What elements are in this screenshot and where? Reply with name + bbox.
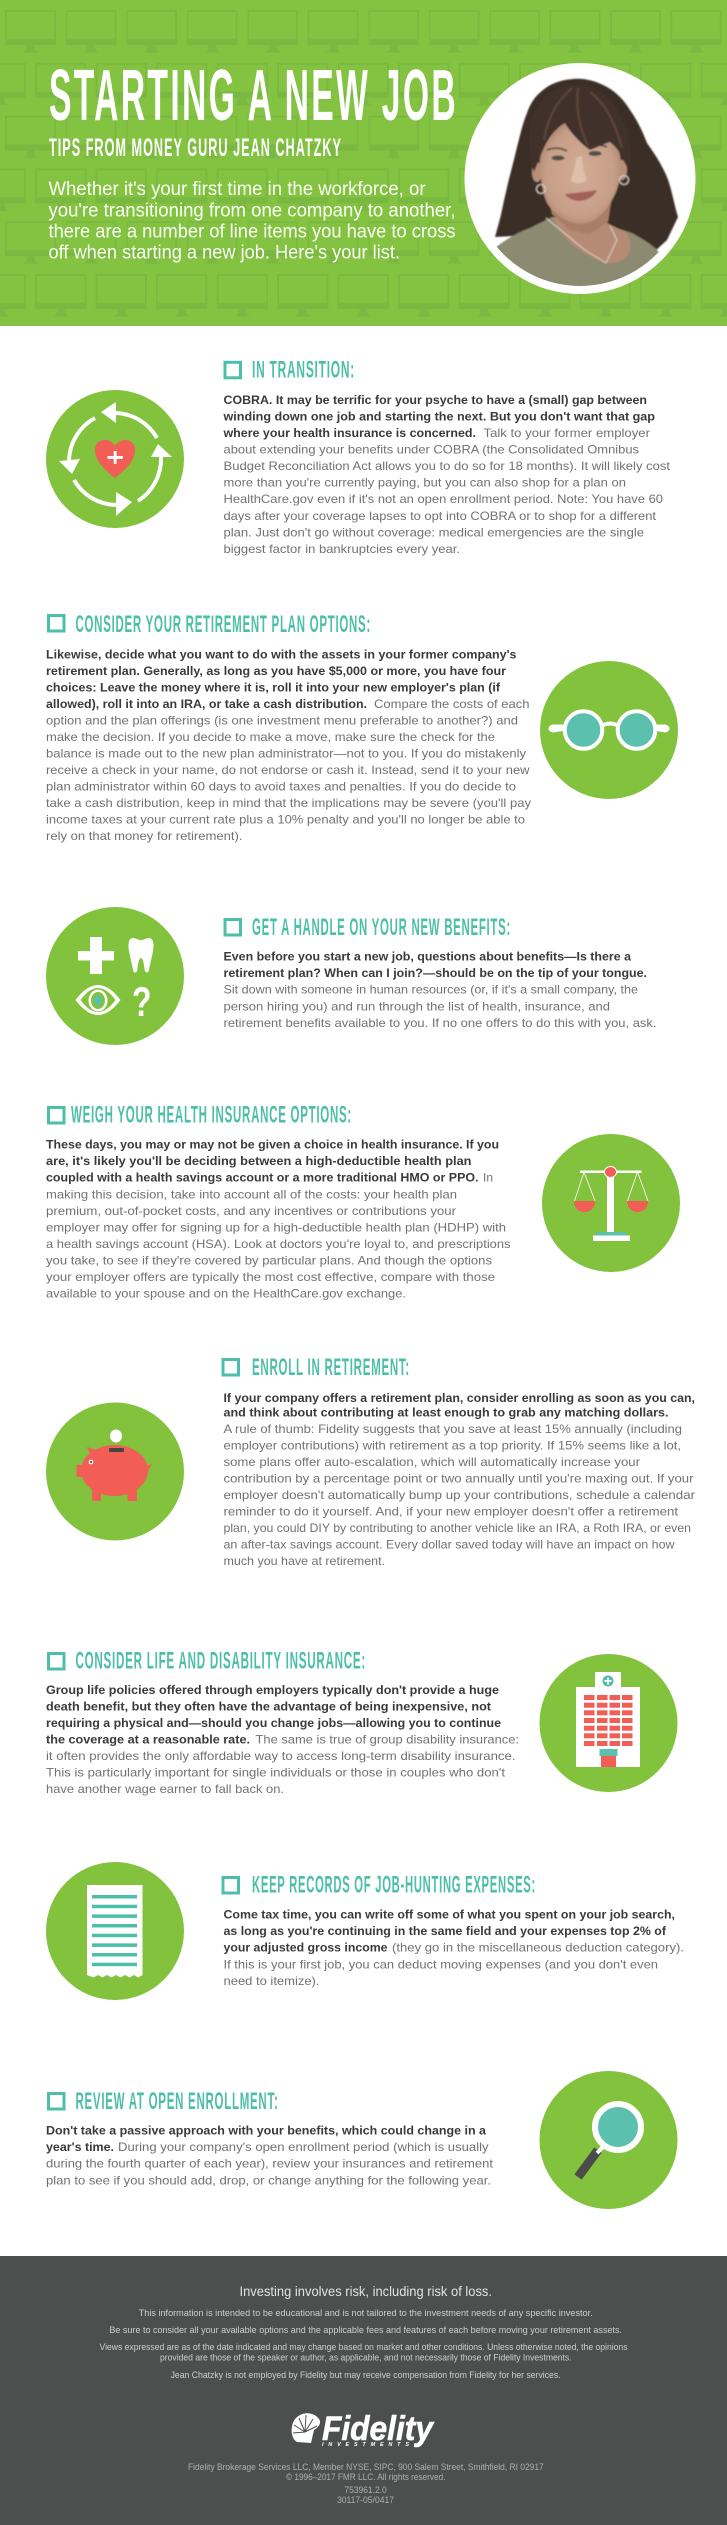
Fidelity logo: INVESTMENTS: [322, 2442, 409, 2448]
body text: (they go in the miscellaneous deduction category).: [392, 1941, 684, 1955]
body text: about extending your benefits under COBRA (the Consolidated Omnibus: [224, 443, 639, 457]
body text: During your company's open enrollment period (which is usually: [118, 2140, 489, 2154]
body text: available to your spouse and on the HealthCare.gov exchange.: [46, 1286, 406, 1300]
body text: In: [483, 1171, 493, 1185]
body text: Compare the costs of each: [374, 697, 530, 711]
body text: Come tax time, you can write off some of what you spent on your job search,: [224, 1908, 675, 1922]
body text: Don't take a passive approach with your benefits, which could change in a: [46, 2124, 486, 2138]
disclosures: Views expressed are as of the date indicated and may change based on market and other conditions. Unless otherwise noted, the opinions: [100, 2341, 628, 2352]
body text: COBRA. It may be terrific for your psyche to have a (small) gap between: [224, 393, 647, 407]
body text: have another wage earner to fall back on.: [46, 1782, 284, 1796]
legal text: Fidelity Brokerage Services LLC, Member NYSE, SIPC, 900 Salem Street, Smithfield, RI 02917: [188, 2462, 544, 2472]
body text: retirement plan. Generally, as long as you have $5,000 or more, you have four: [46, 664, 506, 678]
body text: days after your coverage lapses to opt into COBRA or to shop for a different: [224, 509, 657, 523]
icon: circular arrows and heart: [46, 390, 184, 528]
body text: year's time.: [46, 2140, 114, 2154]
body text: and think about contributing at least enough to grab any matching dollars.: [224, 1405, 668, 1419]
body text: plan administrator within 60 days to avoid taxes and penalties. If you do decide to: [46, 780, 516, 794]
body text: Even before you start a new job, questions about benefits—Is there a: [224, 950, 631, 964]
body text: [224, 950, 656, 1030]
body text: take a cash distribution, keep in mind that the implications may be severe (you'll pay: [46, 796, 531, 810]
body text: retirement benefits available to you. If no one offers to do this with you, ask.: [224, 1016, 656, 1030]
disclosures: Be sure to consider all your available options and the applicable fees and features of each before moving your retirement assets.: [109, 2324, 622, 2335]
body text: employer may offer for signing up for a high-deductible health plan (HDHP) with: [46, 1220, 506, 1234]
body text: employer doesn't automatically bump up your contributions, schedule a calendar: [224, 1488, 695, 1502]
body text: [222, 393, 671, 556]
body text: Talk to your former employer: [484, 426, 650, 440]
checkbox: [48, 1108, 64, 1123]
body text: income taxes at your current rate plus a 10% penalty and you'll no longer be able to: [46, 813, 525, 827]
body text: person hiring you) and run through the list of health, insurance, and: [224, 999, 610, 1013]
body text: make the decision. If you decide to make a move, make sure the check for the: [46, 730, 495, 744]
intro text: there are a number of line items you have to cross: [48, 222, 456, 242]
portrait of Jean Chatzky: [464, 63, 700, 300]
checkbox: [48, 1654, 64, 1669]
body text: some plans offer auto-escalation, which will automatically increase your: [224, 1455, 640, 1469]
icon: magnifying glass: [540, 2071, 678, 2209]
body text: [224, 1908, 684, 1988]
checkbox: [223, 1878, 238, 1893]
body text: contribution by a percentage point or two annually until you're maxing out. If your: [224, 1472, 694, 1486]
section: enroll in retirement: ENROLL IN RETIREMENT:: [252, 1355, 410, 1381]
icon: medical, dental, vision and question mark: ?: [132, 978, 152, 1025]
body text: HealthCare.gov even if it's not an open enrollment period. Note: You have 60: [224, 492, 663, 506]
body text: more than you're currently paying, but you can also shop for a plan on: [224, 476, 626, 490]
body text: reminder to do it yourself. And, if your new employer doesn't offer a retirement: [224, 1504, 679, 1518]
body text: balance is made out to the new plan administrator—not to you. If you do mistakenly: [46, 746, 526, 760]
icon: receipt: [46, 1862, 184, 2000]
body text: as long as you're continuing in the same field and your expenses top 2% of: [224, 1924, 666, 1938]
legal text: © 1996–2017 FMR LLC. All rights reserved.: [286, 2472, 446, 2482]
icon: medical, dental, vision and question mark: [46, 907, 184, 1045]
body text: coupled with a health savings account or a more traditional HMO or PPO.: [46, 1171, 479, 1185]
subtitle: TIPS FROM MONEY GURU JEAN CHATZKY: [49, 134, 342, 162]
icon: balance scale: [542, 1134, 680, 1272]
section: retirement plan options: CONSIDER YOUR RETIREMENT PLAN OPTIONS:: [76, 612, 371, 638]
header banner: [0, 0, 727, 326]
body text: the coverage at a reasonable rate.: [46, 1733, 250, 1747]
body text: plan. Just don't go without coverage: medical emergencies are the single: [224, 525, 644, 539]
heading: IN TRANSITION:: [252, 358, 355, 384]
body text: [46, 1683, 519, 1796]
icon: glasses: [540, 661, 678, 799]
body text: These days, you may or may not be given a choice in health insurance. If you: [46, 1138, 499, 1152]
body text: The same is true of group disability insurance:: [256, 1733, 519, 1747]
body text: it often provides the only affordable way to access long-term disability insurance.: [46, 1749, 516, 1763]
body text: allowed), roll it into an IRA, or take a cash distribution.: [46, 697, 367, 711]
body text: [46, 647, 531, 843]
body text: choices: Leave the money where it is, roll it into your new employer's plan (if: [46, 680, 500, 694]
body text: Sit down with someone in human resources (or, if it's a small company, the: [224, 983, 638, 997]
body text: during the fourth quarter of each year), review your insurances and retirement: [46, 2157, 494, 2171]
body text: option and the plan offerings (is one investment menu preferable to another?) and: [46, 714, 518, 728]
section: retirement plan options: [46, 612, 678, 843]
checkbox: [225, 920, 240, 935]
body text: retirement plan? When can I join?—should be on the tip of your tongue.: [224, 966, 647, 980]
legal text: 753961.2.0: [344, 2485, 387, 2495]
body text: your adjusted gross income: [224, 1941, 388, 1955]
body text: you take, to see if they're covered by particular plans. And though the options: [46, 1253, 492, 1267]
body text: [224, 1391, 695, 1568]
body text: a health savings account (HSA). Look at doctors you're loyal to, and prescriptions: [46, 1237, 511, 1251]
body text: If your company offers a retirement plan, consider enrolling as soon as you can,: [224, 1391, 695, 1405]
body text: your employer offers are typically the most cost effective, compare with those: [46, 1270, 495, 1284]
checkbox: [223, 1360, 238, 1375]
body text: plan to see if you should add, drop, or change anything for the following year.: [46, 2173, 491, 2187]
legal text: [188, 2462, 544, 2505]
body text: Likewise, decide what you want to do with the assets in your former company's: [46, 647, 517, 661]
body text: Group life policies offered through employers typically don't provide a huge: [46, 1683, 499, 1697]
section: open enrollment: REVIEW AT OPEN ENROLLMENT:: [76, 2089, 278, 2115]
section: life and disability insurance: CONSIDER LIFE AND DISABILITY INSURANCE:: [76, 1648, 366, 1674]
body text: where your health insurance is concerned.: [222, 426, 476, 440]
body text: [46, 2124, 494, 2187]
footer: [0, 2256, 727, 2525]
body text: employer contributions) with retirement as a top priority. If 15% seems like a lot,: [224, 1438, 681, 1452]
body text: If this is your first job, you can deduct moving expenses (and you don't even: [224, 1957, 658, 1971]
body text: A rule of thumb: Fidelity suggests that you save at least 15% annually (including: [224, 1422, 682, 1436]
intro text: Whether it's your first time in the workforce, or: [48, 179, 426, 200]
section: in transition: [46, 358, 671, 556]
section: enroll in retirement: [46, 1355, 695, 1568]
disclosures: provided are those of the speaker or author, as applicable, and not necessarily those of Fidelity Investments.: [160, 2352, 572, 2362]
icon: piggy bank: [46, 1402, 184, 1540]
section: health insurance options: WEIGH YOUR HEALTH INSURANCE OPTIONS:: [71, 1103, 352, 1129]
checkbox: [225, 362, 240, 378]
body text: [46, 1138, 511, 1300]
body text: receive a check in your name, do not endorse or cash it. Instead, send it to your new: [46, 763, 530, 777]
body text: need to itemize).: [224, 1974, 320, 1988]
risk statement: Investing involves risk, including risk of loss.: [240, 2283, 492, 2299]
legal text: 30117-05/0417: [337, 2495, 394, 2505]
body text: winding down one job and starting the next. But you don't want that gap: [222, 410, 655, 424]
body text: biggest factor in bankruptcies every year.: [224, 542, 460, 556]
body text: plan, you could DIY by contributing to another vehicle like an IRA, a Roth IRA, or even: [224, 1521, 691, 1535]
body text: rely on that money for retirement).: [46, 829, 242, 843]
body text: requiring a physical and—should you change jobs—allowing you to continue: [46, 1716, 501, 1730]
icon: hospital building: [540, 1654, 678, 1792]
intro text: [48, 179, 456, 264]
section: open enrollment: [46, 2071, 678, 2209]
section: new benefits: [46, 907, 656, 1045]
disclosures: This information is intended to be educational and is not tailored to the investment needs of any specific investor.: [139, 2307, 593, 2318]
section: life and disability insurance: [46, 1648, 678, 1796]
disclosures: Jean Chatzky is not employed by Fidelity but may receive compensation from Fidelity for her services.: [171, 2369, 561, 2380]
body text: This is particularly important for single individuals or those in couples who don't: [46, 1766, 506, 1780]
body text: Budget Reconciliation Act allows you to do so for 18 months). It will likely cost: [224, 459, 671, 473]
body text: an after-tax savings account. Every dollar saved today will have an impact on how: [224, 1538, 675, 1552]
section: job-hunting expenses: [46, 1862, 684, 2000]
disclosures: [100, 2307, 628, 2380]
body text: are, it's likely you'll be deciding between a high-deductible health plan: [46, 1154, 472, 1168]
intro text: off when starting a new job. Here's your list.: [48, 242, 400, 264]
checkbox: [48, 2094, 64, 2109]
body text: making this decision, take into account all of the costs: your health plan: [46, 1187, 457, 1201]
body text: premium, out-of-pocket costs, and any incentives or contributions your: [46, 1204, 456, 1218]
Fidelity logo: Fidelity: [322, 2410, 435, 2448]
checkbox: [48, 616, 64, 631]
body text: death benefit, but they often have the advantage of being inexpensive, not: [46, 1700, 491, 1714]
section: health insurance options: [46, 1103, 680, 1300]
intro text: you're transitioning from one company to another,: [48, 200, 456, 222]
body text: much you have at retirement.: [224, 1554, 385, 1568]
